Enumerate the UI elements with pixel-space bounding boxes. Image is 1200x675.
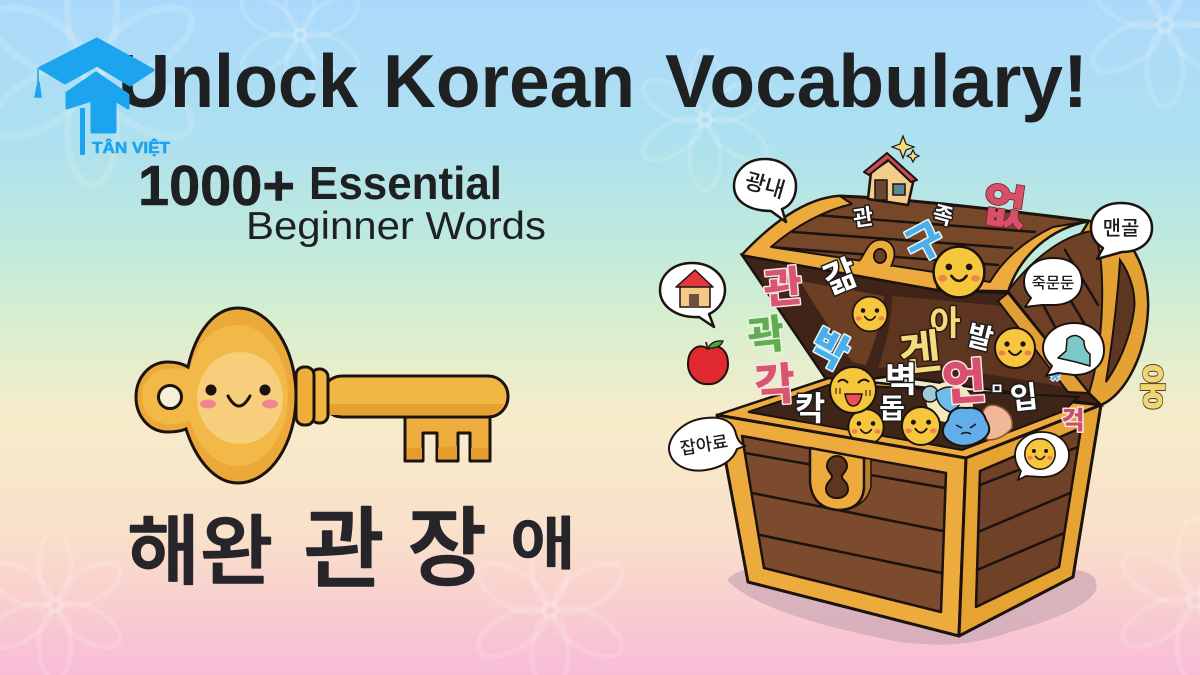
floating Korean letters: ㅁ: [990, 381, 1004, 398]
title: [118, 39, 1088, 123]
floating Korean letters: *: [1050, 365, 1061, 395]
floating Korean letters: 족: [930, 201, 956, 230]
floating Korean letters: 걱: [1061, 407, 1085, 435]
floating Korean letters: 갊: [818, 251, 864, 302]
key shaft: [322, 376, 508, 417]
laughing smiley: [830, 367, 876, 413]
floating Korean letters: 곽: [745, 312, 787, 360]
treasure chest: [717, 196, 1148, 644]
floating Korean letters: 박: [802, 322, 856, 378]
Korean caption: 해완: [127, 510, 273, 595]
floating Korean letters: 칵: [795, 390, 825, 427]
logo: Tan Viet: TÂN VIỆT: [92, 139, 171, 157]
lid inner face: [742, 255, 1101, 405]
speech bubble: jungmundun: 죽문둔: [1032, 275, 1074, 292]
floating Korean letters: 언: [940, 356, 988, 411]
speech bubble: house: [660, 263, 725, 327]
Korean caption: 관: [304, 500, 384, 599]
speech bubble: gwangnae: [734, 159, 796, 222]
logo: Tan Viet: [35, 39, 171, 157]
floating Korean letters: 아: [929, 305, 961, 343]
key bit: [405, 416, 490, 461]
subtitle: [138, 154, 546, 248]
house above lid: [864, 153, 917, 205]
Korean caption: [127, 500, 576, 599]
lid clasp ring: [858, 240, 894, 272]
lid end cap: [1008, 221, 1148, 405]
peach creature: [980, 405, 1012, 440]
floating Korean letters: 관: [762, 262, 804, 313]
key: [136, 308, 508, 483]
floating Korean letters: 각: [753, 360, 797, 411]
chest interior: [717, 378, 1100, 458]
floating Korean letters: 구: [898, 215, 952, 271]
chest front: [717, 415, 966, 636]
key face: [197, 352, 283, 444]
subtitle: 1000+: [138, 154, 295, 218]
Korean caption: 애: [510, 512, 576, 576]
lid dome: [742, 196, 1089, 291]
floating Korean letters: 입: [1009, 381, 1040, 416]
speech bubble: blue creature: [1043, 323, 1104, 376]
floating Korean letters: 없: [979, 177, 1030, 236]
speech bubble: jabaryo: 잡아료: [679, 431, 729, 459]
floating Korean letters: 돕: [879, 393, 905, 424]
key head: [136, 308, 296, 483]
speech bubble: jabaryo: [669, 418, 745, 471]
floating Korean letters: 웅: [1139, 363, 1167, 415]
floating Korean letters: [745, 177, 1167, 435]
floating Korean letters: 관: [851, 204, 875, 231]
blue elephant: [922, 381, 973, 422]
floating Korean letters: 겐: [896, 325, 944, 381]
title: Unlock: [118, 39, 358, 123]
floating Korean letters: 벽: [885, 361, 917, 400]
speech bubble: gwangnae: 광내: [742, 168, 788, 203]
lid gold trim: [742, 196, 938, 290]
speech bubble: maengol: 맨골: [1103, 217, 1139, 240]
subtitle: Essential: [309, 157, 502, 209]
subtitle: Beginner Words: [246, 205, 546, 248]
speech bubble: maengol: [1091, 203, 1152, 259]
key collar: [296, 367, 328, 425]
smileys: [830, 247, 1035, 413]
Korean caption: 장: [407, 501, 487, 597]
interior items: [848, 381, 1012, 446]
chest side: [959, 405, 1101, 636]
chest hasp: [810, 448, 871, 510]
speech bubble: jungmundun: [1024, 258, 1082, 307]
speech bubble: smiley: [1015, 432, 1069, 480]
house icon: [676, 270, 713, 307]
chest shadow: [727, 569, 1097, 644]
title: Korean: [383, 39, 635, 123]
floating Korean letters: 발: [964, 319, 996, 356]
apple: [688, 341, 728, 384]
title: Vocabulary!: [665, 39, 1088, 123]
sparkles: [892, 136, 919, 162]
blue cloud creature: [943, 408, 989, 446]
